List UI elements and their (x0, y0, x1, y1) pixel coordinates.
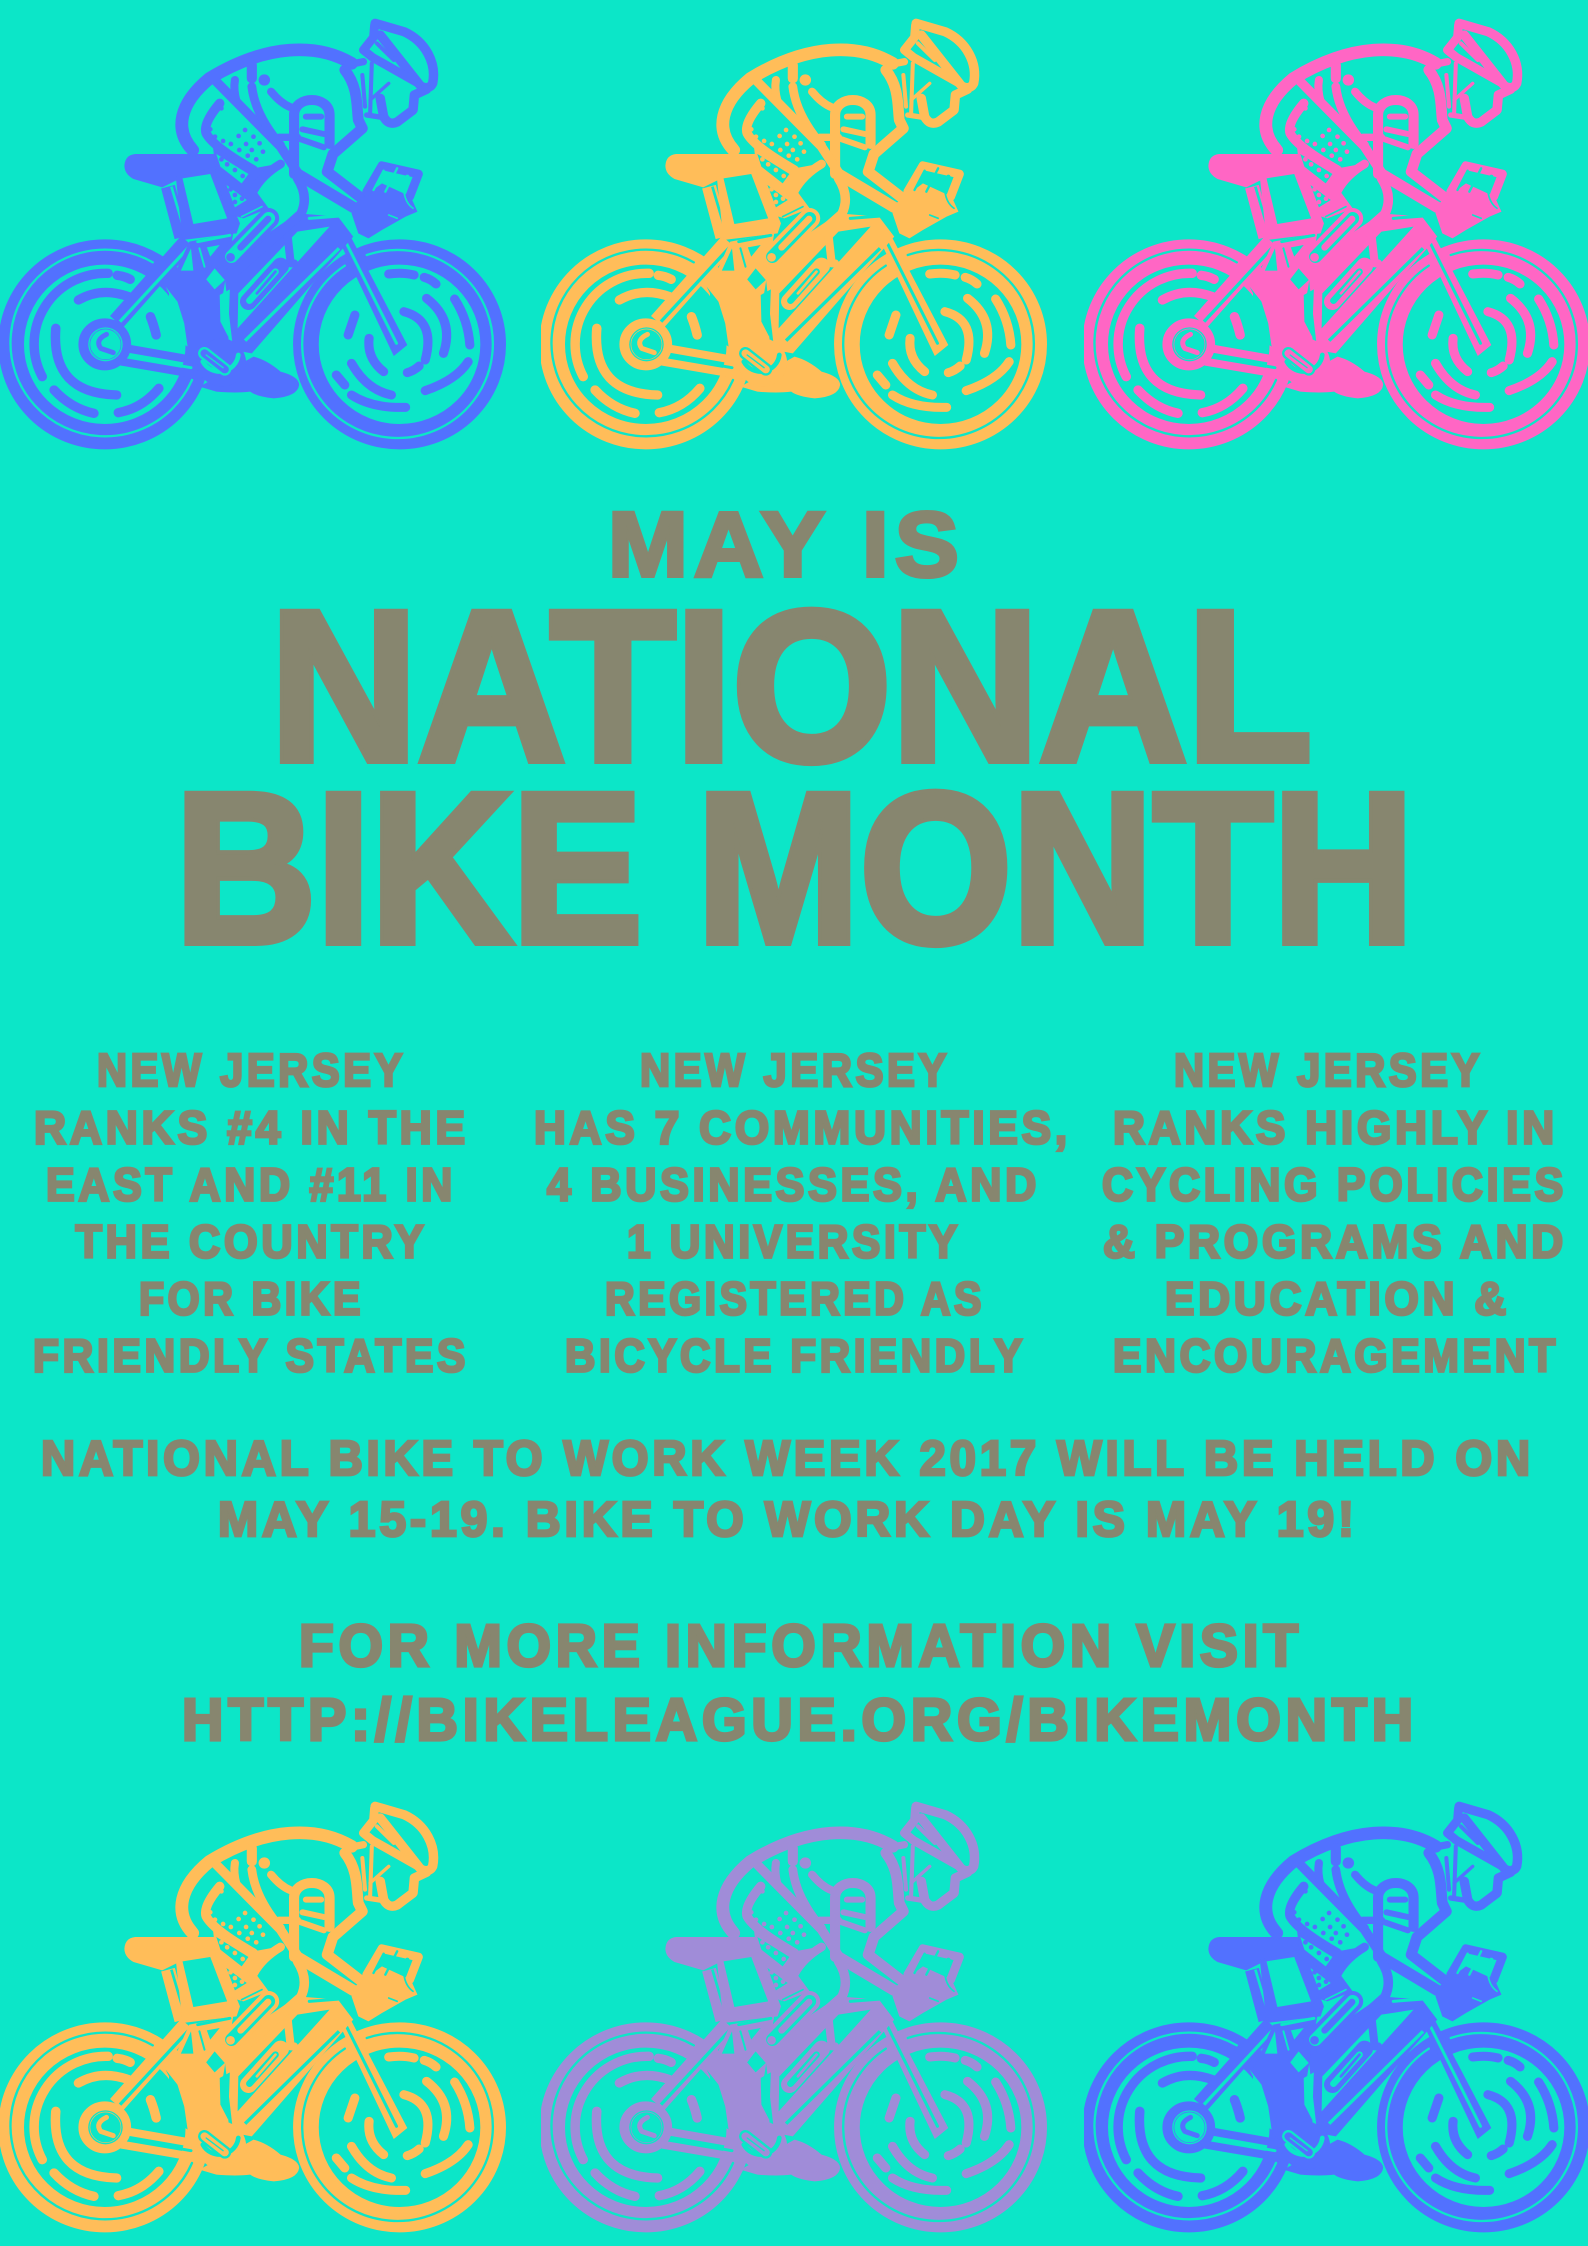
text block: bike to work week: MAY 15-19. BIKE TO WORK DAY IS MAY 19! (218, 1493, 1358, 1547)
text block: policies and programs: CYCLING POLICIES (1102, 1158, 1567, 1210)
text block: policies and programs: EDUCATION & (1165, 1272, 1510, 1324)
text block: bicycle friendly registrations: NEW JERSEY (640, 1044, 950, 1096)
text block: bike to work week: NATIONAL BIKE TO WORK WEEK 2017 WILL BE HELD ON (41, 1432, 1534, 1486)
text block: state ranking: THE COUNTRY (76, 1216, 428, 1268)
text block: more information link: HTTP://BIKELEAGUE.ORG/BIKEMONTH (182, 1687, 1418, 1753)
title: MAY IS (608, 494, 965, 596)
text block: bicycle friendly registrations: 4 BUSINESSES, AND (547, 1158, 1040, 1210)
text block: bicycle friendly registrations: BICYCLE FRIENDLY (565, 1330, 1026, 1382)
icon: purple cyclist bottom centre (551, 1806, 1034, 2221)
text block: policies and programs (1102, 1044, 1567, 1382)
text block: bicycle friendly registrations: REGISTERED AS (605, 1272, 985, 1324)
title (175, 494, 1414, 988)
text block: state ranking: FOR BIKE (139, 1272, 364, 1324)
icon: pink cyclist top right (1094, 23, 1577, 438)
icon: yellow cyclist top centre (551, 23, 1034, 438)
text block: state ranking: NEW JERSEY (97, 1044, 406, 1096)
title: BIKE MONTH (175, 749, 1414, 988)
text block: more information link: FOR MORE INFORMATION VISIT (299, 1613, 1303, 1679)
text block: state ranking: FRIENDLY STATES (33, 1330, 469, 1382)
text block: bicycle friendly registrations: 1 UNIVERSITY (627, 1216, 961, 1268)
icon: blue cyclist bottom right (1094, 1806, 1577, 2221)
text block: bicycle friendly registrations: HAS 7 COMMUNITIES, (534, 1102, 1071, 1154)
icon: yellow cyclist bottom left (10, 1806, 493, 2221)
text block: bike to work week (41, 1432, 1534, 1547)
text block: more information link (182, 1613, 1418, 1753)
text block: state ranking: EAST AND #11 IN (46, 1158, 456, 1210)
text block: policies and programs: & PROGRAMS AND (1103, 1216, 1567, 1268)
title: NATIONAL (270, 567, 1312, 806)
text block: policies and programs: ENCOURAGEMENT (1113, 1330, 1559, 1382)
text block: policies and programs: NEW JERSEY (1174, 1044, 1483, 1096)
text block: policies and programs: RANKS HIGHLY IN (1113, 1102, 1558, 1154)
text block: state ranking (33, 1044, 469, 1382)
text block: state ranking: RANKS #4 IN THE (34, 1102, 469, 1154)
icon: blue cyclist top left (10, 23, 493, 438)
text block: bicycle friendly registrations (534, 1044, 1071, 1382)
